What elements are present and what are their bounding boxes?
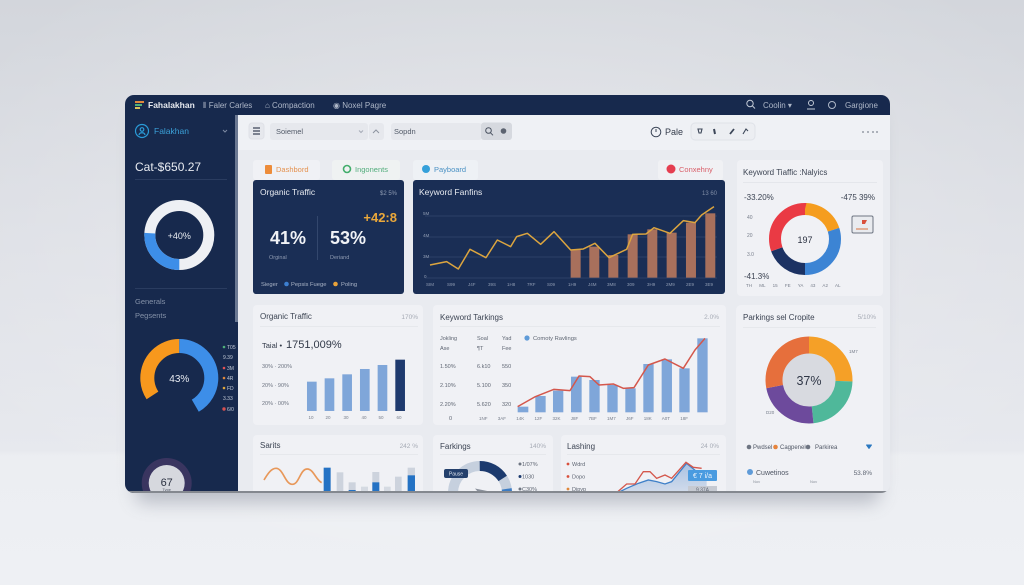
sidebar bottom score circle — [142, 458, 192, 491]
x axis labels: 2E9 — [686, 282, 695, 287]
x axis labels: S99 — [447, 282, 456, 287]
panel heading: Keyword Tarkings — [440, 313, 503, 322]
panel heading: Keyword Fanfins — [419, 187, 482, 197]
x axis labels — [426, 282, 714, 287]
icon: heart — [866, 445, 872, 448]
stat: 53%: Deriand — [330, 255, 349, 261]
table columns: 5.100 — [477, 383, 491, 389]
tab: Payboard: Payboard — [434, 165, 466, 174]
x axis labels — [308, 415, 402, 420]
gauge label: Pause — [449, 472, 463, 478]
gauge legend: 3M — [227, 366, 234, 372]
x axis labels: 40 — [361, 415, 367, 420]
legend — [261, 282, 357, 287]
x axis labels: 1H9 — [568, 282, 577, 287]
sub row: Cuwetinos: 53.8% — [854, 470, 872, 477]
sub row: Cuwetinos: Nov — [810, 479, 817, 484]
tab: Ingonents — [342, 164, 388, 174]
more menu dots — [862, 131, 878, 133]
icon: user — [136, 124, 148, 138]
nav links: ◉ Noxel Pagre — [333, 101, 387, 110]
sidebar menu labels — [135, 298, 166, 320]
trend line — [518, 338, 705, 407]
legend: Dopo — [572, 474, 585, 480]
gauge legend: T05 — [227, 345, 236, 351]
axis labels: 20 — [747, 233, 753, 239]
sidebar bottom score circle: 67 — [161, 477, 173, 489]
nav right controls: Gargione — [845, 101, 878, 110]
donut chart: 197 — [797, 235, 813, 245]
axis labels: 4M — [423, 233, 430, 238]
axis labels: 40 — [747, 215, 753, 221]
donut chart — [775, 209, 835, 269]
panel: Farkings — [433, 435, 553, 520]
icon: logo — [135, 101, 144, 109]
tab: Dashboard: Dashbord — [276, 165, 309, 174]
x axis labels: 1NF 3AF 14K 12F 32K J8F 7BF 1M7 J6F 18K A0T 18F — [479, 416, 688, 421]
gauge legend: FD — [227, 386, 234, 392]
x axis labels: 7RF — [527, 282, 536, 287]
menu button — [249, 123, 264, 139]
bars — [324, 468, 415, 494]
sidebar donut chart: +40% — [168, 231, 191, 241]
panel heading: Farkings — [440, 442, 471, 451]
stat: 41%: Orginal — [269, 255, 287, 261]
bars — [518, 338, 708, 412]
dashboard window — [125, 95, 890, 520]
tab: Payboard — [422, 165, 466, 174]
donut chart — [766, 345, 858, 415]
table columns: 1.50% — [440, 364, 456, 370]
panel: Organic Traffic dark — [253, 180, 404, 294]
legend — [747, 445, 838, 451]
x axis labels: 2M9 — [666, 282, 675, 287]
table columns: Fee — [502, 346, 511, 352]
total figure: Taial • — [262, 341, 283, 350]
table columns: Yad — [502, 336, 511, 342]
user name: Falakhan — [154, 126, 189, 136]
x axis labels: 39S — [488, 282, 496, 287]
axis labels: 5M — [423, 211, 430, 216]
gauge legend — [222, 345, 236, 413]
value badge: € 7 i/a — [693, 473, 712, 480]
select field — [270, 123, 368, 140]
tab: Conxehny — [666, 164, 713, 174]
sidebar amount: Cat-$650.27 — [135, 160, 201, 174]
x axis labels: S09 — [547, 282, 556, 287]
grid lines — [425, 216, 717, 278]
bars — [571, 213, 715, 278]
gauge needle — [475, 488, 497, 493]
panel: Parkings and Cropiite: 5/10% — [858, 314, 876, 321]
panel: Sarits: 242 % — [400, 443, 418, 450]
stats: -475 39% — [841, 193, 875, 202]
dashboard shadow — [135, 115, 880, 503]
chevron — [223, 130, 227, 132]
nav links — [204, 102, 386, 110]
trend line — [430, 207, 714, 269]
search field: Sopdn — [394, 127, 416, 136]
x axis labels: J4M — [588, 282, 597, 287]
panel: Organic Traffic: 170% — [401, 314, 418, 321]
page label: Pale — [665, 127, 683, 137]
donut chart: 1M7 — [849, 349, 858, 354]
panel: Keyword Fanfins dark — [413, 180, 725, 294]
sidebar menu labels: Pegsents — [135, 311, 167, 320]
table columns: 6.k10 — [477, 364, 490, 370]
total figure — [262, 339, 342, 351]
stat: 53%: 53% — [330, 228, 366, 248]
nav links: ⦀ Faler Carles — [203, 101, 252, 110]
axis labels — [262, 364, 292, 407]
gauge — [453, 466, 507, 520]
legend: Pepsis Fuege — [291, 282, 326, 288]
legend: Sieger — [261, 282, 278, 288]
x axis labels: SIM — [426, 282, 434, 287]
panel: Sarits — [253, 435, 423, 495]
legend: Cagpenel — [780, 445, 806, 451]
x axis labels: TH ML 15 FE YA 43 A2 AL — [746, 283, 841, 288]
panel: Organic Traffic dark: $2 5% — [380, 191, 398, 197]
legend: 1/07% — [522, 462, 538, 468]
sub row: Cuwetinos: Cuwetinos — [756, 470, 789, 477]
x axis labels: 50 — [378, 415, 384, 420]
legend: Pwdsel — [753, 445, 772, 451]
stats: -41.3% — [744, 272, 769, 281]
axis labels — [747, 215, 754, 258]
panel heading: Lashing — [567, 442, 595, 451]
x axis labels: 60 — [396, 415, 402, 420]
axis labels: 3.0 — [747, 252, 754, 258]
gauge legend: 6/0 — [227, 407, 234, 413]
sub row: Cuwetinos — [747, 469, 872, 494]
panel heading: Sarits — [260, 441, 280, 450]
gauge legend: 9.39 — [223, 355, 233, 361]
table columns: 5.620 — [477, 402, 491, 408]
x axis labels: 1H8 — [507, 282, 516, 287]
axis labels: 20% · 00% — [262, 401, 289, 407]
stats: -33.20% — [744, 193, 774, 202]
sidebar gauge chart — [147, 346, 211, 410]
area chart — [617, 462, 707, 495]
tab: Ingonents: Ingonents — [355, 165, 388, 174]
gauge legend: 3.33 — [223, 396, 233, 402]
select field: Soiemel — [276, 127, 303, 136]
total figure: 1751,009% — [286, 339, 342, 351]
legend: Parkirea — [815, 445, 838, 451]
sidebar bottom score circle: Type — [162, 487, 172, 492]
axis labels — [423, 212, 429, 278]
nav right controls — [747, 100, 878, 110]
stat: 53% — [330, 231, 366, 259]
panel heading: Organic Traffic — [260, 312, 312, 321]
legend — [518, 462, 538, 493]
x axis labels: 309 — [627, 282, 635, 287]
gauge legend: 4R — [227, 376, 234, 382]
value badge — [688, 470, 717, 481]
toolbar — [238, 115, 890, 140]
legend: Poling — [341, 282, 357, 288]
table columns: Jokling — [440, 336, 457, 342]
x axis labels: J4F — [468, 282, 476, 287]
table columns: 550 — [502, 364, 511, 370]
stats — [744, 193, 875, 281]
table columns: 320 — [502, 402, 511, 408]
icon: export — [852, 216, 873, 233]
legend: Comoty Ravlings — [533, 336, 577, 342]
table columns: ¶T — [477, 346, 484, 352]
panel heading: Parkings sel Cropite — [743, 313, 815, 322]
legend: C30% — [522, 487, 537, 493]
grey badge: 9 37A — [696, 488, 710, 494]
page label — [651, 127, 683, 137]
panel: Farkings: 140% — [529, 443, 546, 450]
search field — [391, 122, 512, 140]
toolbar icon group — [691, 123, 755, 140]
x axis labels: 3H9 — [647, 282, 656, 287]
table columns: 2.10% — [440, 383, 456, 389]
stat: 41% — [269, 231, 306, 260]
panel: Organic Traffic — [253, 305, 423, 425]
tab: Conxehny: Conxehny — [679, 165, 713, 174]
axis labels: 20% · 90% — [262, 383, 289, 389]
highlight number: +42:8 — [363, 210, 397, 225]
sub row: Cuwetinos: Nov — [753, 479, 760, 484]
panel: Lashing: 24 0% — [701, 443, 719, 450]
table columns: 350 — [502, 383, 511, 389]
small button — [369, 123, 384, 140]
legend: 1030 — [522, 474, 534, 480]
table columns: Soal — [477, 336, 488, 342]
wave line — [264, 468, 322, 484]
panel: Keyword Tarkings — [433, 305, 726, 425]
sidebar — [125, 115, 238, 508]
axis labels: 30% · 200% — [262, 364, 292, 370]
panel: Lashing — [561, 435, 726, 495]
table columns: 0 — [449, 416, 452, 422]
table columns: Ase — [440, 346, 449, 352]
legend: Wdrd — [572, 462, 585, 468]
panel: Keyword Traffic Analysis — [737, 160, 883, 296]
panel: Parkings and Cropiite — [736, 305, 883, 495]
panel: Keyword Tarkings: 2.0% — [704, 314, 719, 321]
sidebar donut chart — [150, 206, 209, 264]
panel heading: Organic Traffic — [260, 187, 316, 197]
legend — [567, 462, 586, 493]
top navigation bar — [125, 95, 890, 116]
nav right controls: Coolin ▾ — [763, 101, 792, 110]
axis labels: 3M — [423, 254, 430, 259]
sidebar menu labels: Generals — [135, 297, 166, 306]
x axis labels: 20 — [325, 415, 331, 420]
donut chart: D20 — [766, 410, 775, 415]
panel heading: Keyword Tiaffic :Nalyics — [743, 168, 827, 177]
bars — [307, 360, 405, 411]
axis labels: 0 — [424, 274, 427, 279]
panel: Keyword Fanfins dark: 13 60 — [702, 191, 718, 197]
table columns — [440, 336, 511, 422]
x axis labels: 10 — [308, 415, 314, 420]
nav links: ⌂ Compaction — [265, 101, 315, 110]
legend: Dipyp — [572, 487, 586, 493]
x axis labels: 30 — [343, 415, 349, 420]
brand name: Fahalakhan — [148, 100, 195, 110]
x axis labels: 3M8 — [607, 282, 616, 287]
sidebar gauge chart: 43% — [169, 374, 189, 385]
stat: 41%: 41% — [270, 228, 306, 248]
x axis labels: 3E9 — [705, 282, 714, 287]
table columns: 2.20% — [440, 402, 456, 408]
grey badge — [688, 486, 717, 494]
donut chart: 37% — [796, 374, 822, 388]
